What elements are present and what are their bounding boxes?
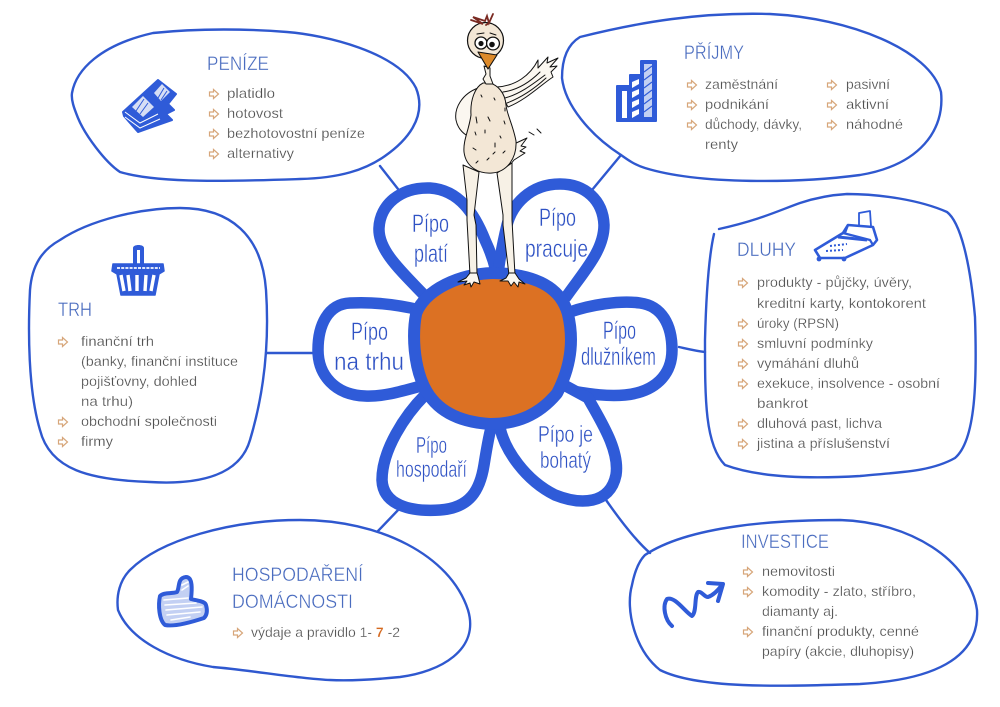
list left: renty: [705, 136, 738, 152]
petal: Pípo dlužníkem: Pípo: [603, 317, 636, 345]
flower center: [420, 279, 565, 418]
list: produkty - půjčky, úvěry,: [757, 274, 912, 290]
list left: [688, 76, 802, 152]
panel outline: [630, 520, 977, 686]
list: smluvní podmínky: [757, 335, 873, 351]
petal: Pípo platí: platí: [414, 240, 448, 268]
back wing: [456, 88, 478, 137]
icon: money: [123, 80, 176, 132]
list: na trhu): [81, 393, 133, 409]
list: [210, 85, 365, 161]
chicken illustration: [456, 14, 558, 287]
list: exekuce, insolvence - osobní: [757, 375, 940, 391]
body: [464, 83, 516, 173]
legs: [463, 165, 479, 275]
heading: PŘÍJMY: [684, 42, 744, 64]
icon: bar chart: [617, 61, 656, 121]
hair: [471, 14, 493, 25]
petal: Pípo na trhu: Pípo: [351, 318, 388, 346]
list left: důchody, dávky,: [705, 116, 802, 132]
list: bezhotovostní peníze: [227, 125, 365, 141]
icon: basket: [112, 245, 164, 295]
list: kreditní karty, kontokorent: [757, 295, 926, 311]
list: komodity - zlato, stříbro,: [762, 583, 916, 599]
list right: aktivní: [846, 96, 889, 112]
icon: cash register: [815, 211, 877, 261]
petal: Pípo dlužníkem: dlužníkem: [581, 343, 656, 371]
panel: hospodaření domácnosti: [118, 520, 470, 680]
list: výdaje a pravidlo 1- 7 -2: [251, 624, 400, 640]
list: [744, 563, 919, 659]
list: firmy: [81, 433, 113, 449]
petal: Pípo dlužníkem: [490, 302, 672, 396]
list: alternativy: [227, 145, 294, 161]
beak: [478, 52, 497, 69]
panel: peníze: [72, 30, 419, 181]
petal: Pípo hospodaří: hospodaří: [396, 456, 467, 482]
eyes: [475, 33, 499, 50]
petal: Pípo na trhu: [318, 303, 490, 396]
icon: growth arrow: [665, 583, 723, 626]
list: [58, 333, 238, 449]
heading: DLUHY: [737, 240, 796, 261]
tail: [510, 138, 527, 165]
petal: Pípo pracuje: Pípo: [539, 204, 576, 232]
panel: příjmy: [562, 14, 941, 181]
petal: Pípo hospodaří: [382, 345, 492, 510]
list: diamanty aj.: [762, 603, 838, 619]
petal: Pípo je bohatý: [490, 345, 617, 501]
list right: [828, 76, 903, 132]
list: finanční produkty, cenné: [762, 623, 919, 639]
list left: podnikání: [705, 96, 769, 112]
panel: investice: [630, 520, 977, 686]
panel: trh: [29, 208, 267, 483]
panel outline: [705, 194, 976, 477]
list: úroky (RPSN): [757, 315, 839, 331]
list left: zaměstnání: [705, 76, 778, 92]
neck: [483, 66, 493, 84]
connectors between petals and panels: [266, 155, 705, 553]
list: hotovost: [227, 105, 283, 121]
feet: [458, 273, 480, 287]
panel outline: [72, 30, 419, 181]
petal: Pípo pracuje: pracuje: [525, 235, 588, 263]
list: jistina a příslušenství: [756, 435, 890, 451]
feather marks: [473, 95, 505, 163]
heading: TRH: [58, 300, 92, 321]
list: papíry (akcie, dluhopisy): [762, 643, 914, 659]
petal: Pípo je bohatý: Pípo je: [538, 421, 593, 447]
petal: Pípo hospodaří: Pípo: [416, 432, 447, 458]
petal: Pípo platí: Pípo: [412, 210, 449, 238]
list: [738, 274, 940, 451]
list: obchodní společnosti: [81, 413, 217, 429]
petal: Pípo pracuje: [490, 184, 604, 345]
heading: INVESTICE: [741, 532, 829, 553]
heading: PENÍZE: [207, 54, 269, 75]
panel outline: [29, 208, 267, 483]
list right: pasivní: [846, 76, 890, 92]
list: nemovitosti: [762, 563, 835, 579]
list: bankrot: [757, 395, 808, 411]
petal: Pípo je bohatý: bohatý: [540, 447, 591, 473]
list: dluhová past, lichva: [757, 415, 882, 431]
list: platidlo: [227, 85, 275, 101]
heading: DOMÁCNOSTI: [232, 592, 353, 613]
list: vymáhání dluhů: [757, 355, 859, 371]
panel outline: [118, 520, 470, 680]
flower: [318, 184, 672, 510]
list: (banky, finanční instituce: [81, 353, 238, 369]
list: pojišťovny, dohled: [81, 373, 197, 389]
list: finanční trh: [81, 333, 154, 349]
head: [468, 22, 504, 58]
panel outline: [562, 14, 941, 181]
petal: Pípo platí: [379, 188, 498, 345]
raised wing: [497, 57, 558, 107]
heading: [232, 564, 364, 613]
heading: HOSPODAŘENÍ: [232, 564, 364, 586]
panel: dluhy: [705, 194, 976, 477]
petal: Pípo na trhu: na trhu: [334, 348, 404, 376]
list right: náhodné: [846, 116, 903, 132]
icon: thumbs up: [159, 577, 207, 625]
